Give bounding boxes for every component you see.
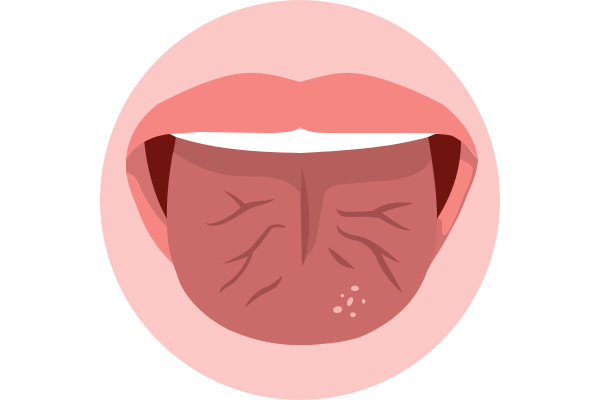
central fissure xyxy=(301,167,309,267)
left dark cavity xyxy=(144,134,176,219)
teeth xyxy=(170,130,435,153)
tongue xyxy=(167,137,437,345)
spot xyxy=(350,312,356,317)
background circle xyxy=(100,0,500,400)
spot xyxy=(346,296,354,307)
tongue surface left of groove xyxy=(167,152,437,345)
left middle crack xyxy=(220,224,287,293)
left upper crack xyxy=(205,190,275,226)
white spots xyxy=(332,286,365,317)
spot xyxy=(332,306,343,314)
spot xyxy=(351,286,359,291)
upper lip xyxy=(126,73,478,160)
left cheek highlight xyxy=(126,172,175,266)
left lower crack xyxy=(245,276,282,308)
tongue back shadow xyxy=(167,137,437,345)
right fissures xyxy=(328,202,413,317)
spot xyxy=(341,294,344,297)
right cheek highlight xyxy=(437,159,473,235)
right middle crack xyxy=(337,224,403,293)
right lower crack xyxy=(328,247,355,269)
spot xyxy=(362,299,365,304)
right dark cavity xyxy=(428,134,461,219)
mouth interior side walls xyxy=(126,134,478,275)
right upper crack xyxy=(336,202,413,230)
left fissures xyxy=(205,190,287,308)
